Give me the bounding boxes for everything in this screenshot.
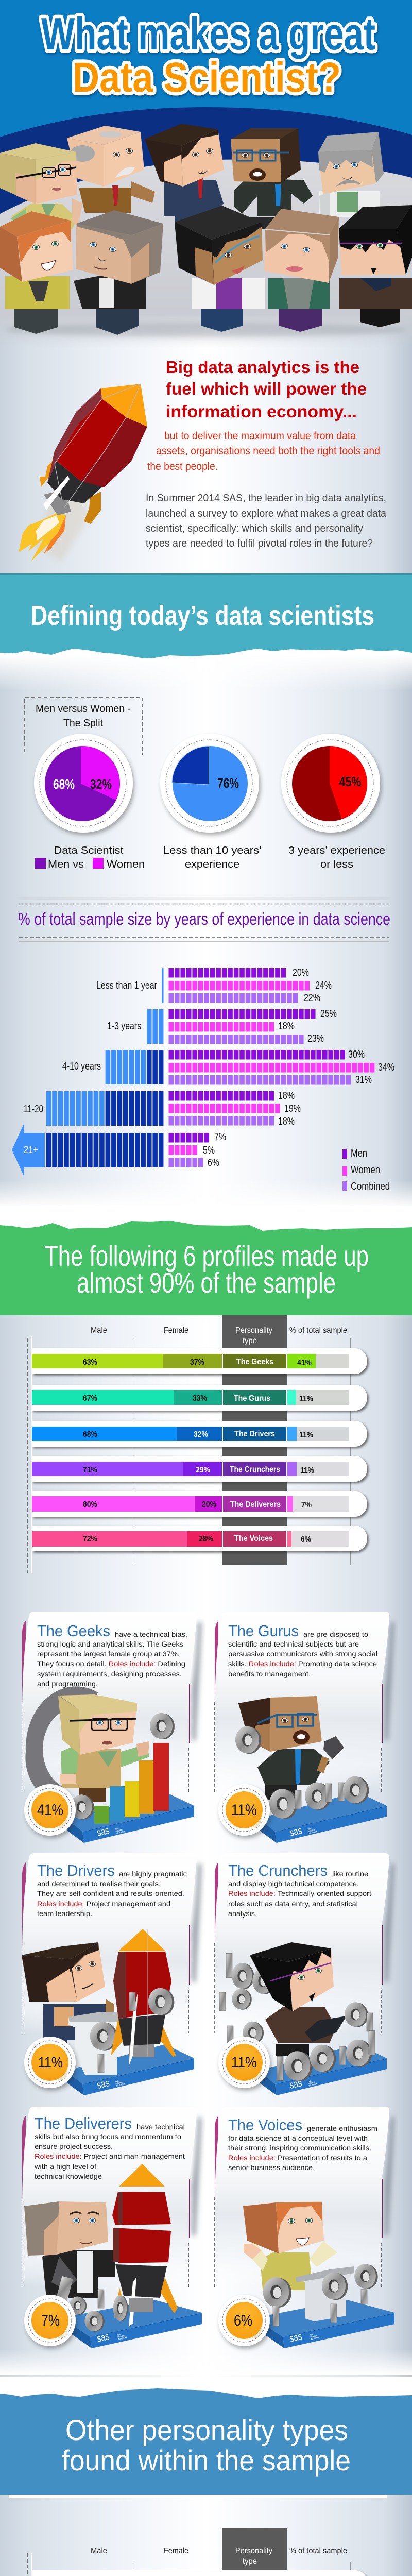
callout: men versus women bbox=[25, 698, 142, 755]
row: less than 1 year: 22% bbox=[304, 992, 320, 1004]
text: geeks: strong logic and analytical skills. The Geeks bbox=[37, 1640, 183, 1648]
row: the gurus bbox=[32, 1385, 367, 1411]
percentage badge: 11%: 11% bbox=[231, 1802, 257, 1819]
text: voices: senior business audience. bbox=[228, 2163, 315, 2172]
row: combined other types bbox=[32, 2570, 368, 2576]
pie label: data scientist: Women bbox=[107, 859, 145, 870]
illustration: geek with bar chart bbox=[25, 1686, 194, 1843]
character: the deliverers front bbox=[74, 210, 163, 335]
percentage badge: 6% bbox=[218, 2295, 270, 2346]
profile card: the geeks bbox=[22, 1612, 202, 1843]
text: deliverers: Roles include: Project and man-management bbox=[35, 2152, 185, 2160]
character: the lynchpins front bbox=[175, 206, 265, 332]
pie label: three years bbox=[288, 845, 385, 870]
text: crunchers: analysis. bbox=[228, 1909, 257, 1918]
row: the crunchers: 11% bbox=[300, 1466, 314, 1475]
section: defining today's data scientists bbox=[0, 573, 412, 1208]
banner: blue torn paper: found within the sample bbox=[62, 2444, 351, 2477]
table header: % of total sample bbox=[289, 1326, 347, 1335]
character: the voices front bbox=[0, 211, 73, 334]
text: drivers: They are self-confident and results-oriented. bbox=[37, 1889, 184, 1897]
platform logo bbox=[96, 2077, 125, 2091]
row: the gurus: The Gurus bbox=[234, 1394, 270, 1403]
pie label: data scientist bbox=[35, 845, 145, 870]
intro paragraph: scientist, specifically: which skills and personality bbox=[146, 523, 363, 534]
platform logo: sas bbox=[288, 2331, 303, 2345]
section: six profiles bbox=[0, 1221, 412, 2377]
row: the voices: 72% bbox=[83, 1535, 97, 1544]
platform logo: THE bbox=[117, 2333, 122, 2336]
title bbox=[41, 8, 375, 101]
row: less than 1 year bbox=[96, 967, 332, 1004]
platform logo: POWER bbox=[115, 1829, 123, 1833]
text: deliverers: with a high level of bbox=[34, 2162, 96, 2171]
table header: Female bbox=[164, 1326, 188, 1335]
row: the deliverers: 80% bbox=[83, 1500, 97, 1509]
section: introduction bbox=[19, 358, 387, 562]
row: 4-10 years: 34% bbox=[378, 1062, 394, 1073]
text: gurus bbox=[228, 1622, 377, 1678]
subheading: assets, organisations need both the right tools and bbox=[156, 445, 380, 457]
callout: men versus women: Men versus Women - bbox=[36, 703, 131, 715]
text: crunchers bbox=[228, 1861, 371, 1918]
platform logo: THE bbox=[307, 1827, 312, 1831]
row: 21+ years with arrow: 7% bbox=[214, 1131, 226, 1143]
table header bbox=[91, 1326, 347, 1345]
platform logo bbox=[288, 2077, 318, 2091]
character: the gurus back bbox=[231, 128, 313, 229]
character: the drivers back bbox=[145, 124, 224, 229]
platform logo bbox=[96, 2331, 127, 2345]
row: the crunchers: 71% bbox=[83, 1466, 97, 1475]
platform logo: sas bbox=[288, 1825, 303, 1839]
profile card: the voices bbox=[214, 2107, 394, 2348]
platform logo: POWER bbox=[308, 1829, 315, 1833]
legend: Combined bbox=[351, 1181, 390, 1192]
row: the drivers bbox=[32, 1421, 367, 1447]
text: gurus: The Gurus bbox=[228, 1622, 299, 1640]
row: the drivers: 32% bbox=[194, 1430, 208, 1439]
text: geeks: represent the largest female group at 37%. bbox=[37, 1650, 180, 1658]
text: geeks: have a technical bias, bbox=[115, 1630, 187, 1638]
platform logo: sas bbox=[96, 2331, 111, 2345]
text: deliverers: The Deliverers bbox=[35, 2114, 132, 2132]
banner: blue torn paper bbox=[0, 2388, 412, 2495]
row: 1-3 years: 25% bbox=[320, 1008, 337, 1020]
illustration: group of paper-toy data scientists bbox=[0, 124, 412, 337]
section: other personality types bbox=[0, 2388, 412, 2576]
row: the voices bbox=[32, 1526, 367, 1551]
row: less than 1 year: 20% bbox=[293, 967, 309, 978]
text: voices: for data science at a conceptual level with bbox=[228, 2134, 368, 2142]
text: drivers: team leadership. bbox=[37, 1909, 92, 1918]
row: the voices: 6% bbox=[301, 1535, 311, 1544]
text: crunchers: and display high technical competence. bbox=[228, 1879, 359, 1888]
text: gurus: benefits to management. bbox=[228, 1670, 311, 1678]
platform logo: TO KNOW bbox=[116, 1831, 125, 1835]
text: gurus: scientific and technical subjects but are bbox=[228, 1640, 359, 1648]
pie label: data scientist: Men vs bbox=[48, 859, 84, 870]
text: crunchers: The Crunchers bbox=[228, 1861, 328, 1879]
pie chart: less than 10 years bbox=[160, 734, 259, 833]
row: 21+ years with arrow bbox=[12, 1123, 226, 1177]
percentage badge: 11% bbox=[218, 2037, 270, 2088]
illustration: rocket bbox=[19, 384, 147, 562]
row: the drivers: 68% bbox=[83, 1430, 97, 1439]
intro paragraph bbox=[146, 493, 387, 549]
pie chart: men vs women: 68% bbox=[53, 776, 75, 792]
character: the crunchers front bbox=[339, 205, 412, 327]
illustration: cruncher with digits bbox=[219, 1942, 387, 2095]
table header: Female bbox=[164, 2547, 188, 2555]
headline: information economy... bbox=[166, 402, 357, 421]
platform logo: THE bbox=[115, 1827, 119, 1831]
platform logo: TO KNOW bbox=[116, 2083, 125, 2087]
platform logo: THE bbox=[310, 2333, 314, 2336]
subheading: the best people. bbox=[147, 461, 218, 472]
percentage badge: 11% bbox=[24, 2037, 76, 2088]
illustration: deliverer building rocket bbox=[24, 2164, 202, 2348]
percentage badge: 11%: 11% bbox=[231, 2054, 257, 2071]
platform logo bbox=[288, 2331, 320, 2345]
text: drivers: and determined to realise their goals. bbox=[37, 1879, 161, 1888]
table: personality types by gender bbox=[28, 1315, 367, 1573]
row: 1-3 years: 1-3 years bbox=[107, 1021, 141, 1032]
row: 21+ years with arrow: 21+ bbox=[24, 1144, 38, 1156]
pie label: data scientist: Data Scientist bbox=[54, 845, 124, 856]
text: voices: Roles include: Presentation of results to a bbox=[228, 2154, 367, 2162]
text: drivers: The Drivers bbox=[37, 1861, 115, 1879]
legend bbox=[342, 1148, 390, 1192]
banner: blue torn paper: Other personality types bbox=[65, 2414, 348, 2446]
intro paragraph: types are needed to fulfil pivotal roles in the future? bbox=[146, 538, 373, 549]
row: 1-3 years bbox=[107, 1008, 337, 1044]
text: deliverers: technical knowledge bbox=[35, 2172, 102, 2180]
platform logo: POWER bbox=[310, 2335, 317, 2338]
row: the geeks: The Geeks bbox=[236, 1358, 273, 1366]
pie chart: less than 10 years: 76% bbox=[217, 775, 239, 791]
platform logo: TO KNOW bbox=[311, 2336, 320, 2341]
title: Data Scientist? bbox=[73, 54, 341, 101]
character: grey-haired scientist back right bbox=[318, 132, 384, 219]
illustration: voice at podium bbox=[243, 2201, 394, 2348]
text: drivers: are highly pragmatic bbox=[119, 1870, 187, 1878]
character: the teachers front bbox=[264, 209, 339, 332]
table: other personality types bbox=[28, 2528, 368, 2576]
row: the drivers: The Drivers bbox=[234, 1430, 275, 1438]
intro paragraph: launched a survey to explore what makes a great data bbox=[146, 508, 387, 519]
banner: green torn paper: almost 90% of the sample bbox=[77, 1266, 336, 1299]
row: 11-20 years: 11-20 bbox=[24, 1104, 43, 1115]
row: 21+ years with arrow: 5% bbox=[203, 1145, 215, 1156]
flames bbox=[19, 513, 66, 562]
callout: men versus women: The Split bbox=[63, 718, 103, 729]
row: the deliverers: The Deliverers bbox=[230, 1500, 281, 1509]
row: the drivers: 11% bbox=[299, 1431, 313, 1439]
profile card: the deliverers bbox=[22, 2107, 202, 2348]
text: geeks: The Geeks bbox=[37, 1622, 110, 1640]
row: the geeks bbox=[32, 1348, 367, 1374]
row: the deliverers: 7% bbox=[301, 1501, 312, 1510]
profile card: the crunchers bbox=[214, 1853, 394, 2095]
pie chart: 3 years or less bbox=[281, 734, 380, 833]
row: 4-10 years: 31% bbox=[355, 1074, 372, 1086]
row: the geeks: 63% bbox=[83, 1358, 97, 1367]
text: drivers: Roles include: Project management and bbox=[37, 1900, 170, 1908]
pie chart: 3 years or less: 45% bbox=[339, 774, 362, 789]
text: crunchers: Roles include: Technically-oriented support bbox=[228, 1889, 371, 1897]
platform logo: sas bbox=[288, 2077, 303, 2091]
banner: green torn paper bbox=[0, 1221, 412, 1315]
pie label: three years: 3 years’ experience bbox=[288, 845, 385, 856]
platform logo: TO KNOW bbox=[118, 2336, 127, 2341]
text: voices bbox=[228, 2116, 377, 2172]
percentage badge: 11%: 11% bbox=[38, 2054, 63, 2071]
subheading bbox=[147, 430, 380, 472]
row: the gurus: 33% bbox=[193, 1394, 207, 1403]
text: drivers bbox=[37, 1861, 187, 1918]
pie label: experience: Less than 10 years’ bbox=[163, 845, 262, 856]
platform logo bbox=[288, 1825, 318, 1839]
section: hero bbox=[0, 0, 412, 573]
text: deliverers: have technical bbox=[136, 2123, 185, 2131]
percentage badge: 11% bbox=[218, 1784, 270, 1836]
row: 21+ years with arrow: 6% bbox=[208, 1157, 219, 1168]
platform logo: TO KNOW bbox=[308, 2083, 318, 2087]
table header: type bbox=[243, 2557, 257, 2566]
pie label: experience bbox=[163, 845, 262, 870]
row: 1-3 years: 18% bbox=[278, 1021, 295, 1032]
platform logo: sas bbox=[96, 1825, 111, 1839]
text: deliverers bbox=[34, 2114, 185, 2180]
percentage badge: 41% bbox=[24, 1784, 76, 1836]
text: crunchers: roles such as data entry, and statistical bbox=[228, 1900, 358, 1908]
pie chart: men vs women: 32% bbox=[90, 776, 112, 792]
pie label: three years: or less bbox=[320, 859, 353, 870]
table header: type bbox=[243, 1336, 257, 1345]
row: 11-20 years bbox=[24, 1090, 301, 1127]
text: crunchers: like routine bbox=[332, 1870, 368, 1878]
row: 1-3 years: 23% bbox=[307, 1033, 324, 1044]
pie chart: men vs women bbox=[34, 734, 133, 833]
character: the geeks back left bbox=[0, 143, 82, 229]
row: less than 1 year: Less than 1 year bbox=[96, 980, 157, 991]
legend: Women bbox=[351, 1164, 380, 1176]
illustration: driver with rocket bbox=[22, 1929, 194, 2095]
row: 11-20 years: 18% bbox=[278, 1116, 295, 1127]
text: voices: their strong, inspiring communication skills. bbox=[228, 2144, 371, 2152]
table header: % of total sample bbox=[289, 2547, 347, 2555]
row: the voices: The Voices bbox=[234, 1534, 273, 1543]
bar chart: experience by gender bbox=[12, 967, 394, 1192]
text: deliverers: skills but also bring focus and momentum to bbox=[35, 2132, 181, 2141]
platform logo: sas bbox=[96, 2077, 111, 2091]
platform logo: POWER bbox=[115, 2081, 123, 2085]
text: gurus: are pre-disposed to bbox=[303, 1630, 368, 1638]
percentage badge: 6%: 6% bbox=[234, 2312, 252, 2329]
row: 4-10 years: 4-10 years bbox=[62, 1061, 101, 1072]
headline: fuel which will power the bbox=[166, 379, 367, 398]
table header bbox=[91, 2547, 347, 2566]
platform logo: TO KNOW bbox=[308, 1831, 318, 1835]
percentage badge: 7% bbox=[24, 2295, 76, 2346]
row: the deliverers: 20% bbox=[202, 1500, 216, 1509]
platform logo: THE bbox=[115, 2080, 119, 2083]
row: the deliverers bbox=[32, 1491, 367, 1517]
row: the crunchers: 29% bbox=[196, 1466, 210, 1475]
row: 4-10 years bbox=[62, 1049, 394, 1086]
banner: teal torn paper bbox=[0, 573, 412, 658]
headline bbox=[166, 358, 367, 421]
platform logo: POWER bbox=[308, 2081, 315, 2085]
intro paragraph: In Summer 2014 SAS, the leader in big data analytics, bbox=[146, 493, 386, 504]
row: the voices: 28% bbox=[199, 1535, 213, 1544]
row: 11-20 years: 18% bbox=[278, 1090, 295, 1101]
row: the crunchers: The Crunchers bbox=[230, 1465, 280, 1474]
table header: Male bbox=[91, 1326, 107, 1335]
text: gurus: skills. Roles include: Promoting data science bbox=[228, 1659, 377, 1668]
profile card: the drivers bbox=[22, 1853, 202, 2095]
text: deliverers: ensure project success. bbox=[35, 2142, 113, 2150]
platform logo bbox=[96, 1825, 125, 1839]
row: the gurus: 11% bbox=[299, 1395, 313, 1403]
text: geeks: They focus on detail. Roles include: Defining bbox=[37, 1659, 185, 1668]
row: the gurus: 67% bbox=[83, 1394, 97, 1403]
row: 4-10 years: 30% bbox=[348, 1049, 365, 1060]
text: gurus: persuasive communicators with strong social bbox=[228, 1650, 377, 1658]
table header: Personality bbox=[235, 2547, 272, 2555]
percentage badge: 41%: 41% bbox=[37, 1802, 63, 1819]
platform logo: POWER bbox=[117, 2335, 125, 2338]
profile card: the gurus bbox=[214, 1612, 394, 1843]
illustration: guru with binary digits bbox=[235, 1696, 387, 1843]
percentage badge: 7%: 7% bbox=[41, 2312, 60, 2329]
subheading: but to deliver the maximum value from data bbox=[164, 430, 356, 442]
row: less than 1 year: 24% bbox=[315, 980, 332, 991]
character: the ground breakers back bbox=[67, 126, 155, 213]
headline: Big data analytics is the bbox=[166, 358, 359, 377]
text: geeks bbox=[37, 1622, 187, 1688]
table header: Male bbox=[91, 2547, 107, 2555]
row: the geeks: 37% bbox=[190, 1358, 204, 1367]
text: geeks: and programming. bbox=[37, 1680, 98, 1688]
text: geeks: system requirements, designing processes, bbox=[37, 1670, 182, 1678]
row: the crunchers bbox=[32, 1456, 367, 1482]
pie label: experience: experience bbox=[185, 859, 239, 870]
text: voices: The Voices bbox=[228, 2116, 302, 2134]
legend: Men bbox=[351, 1148, 367, 1159]
row: 11-20 years: 19% bbox=[284, 1103, 301, 1114]
table header: Personality bbox=[235, 1326, 272, 1335]
platform logo: THE bbox=[307, 2080, 312, 2083]
text: voices: generate enthusiasm bbox=[307, 2124, 377, 2132]
row: the geeks: 41% bbox=[297, 1359, 312, 1367]
